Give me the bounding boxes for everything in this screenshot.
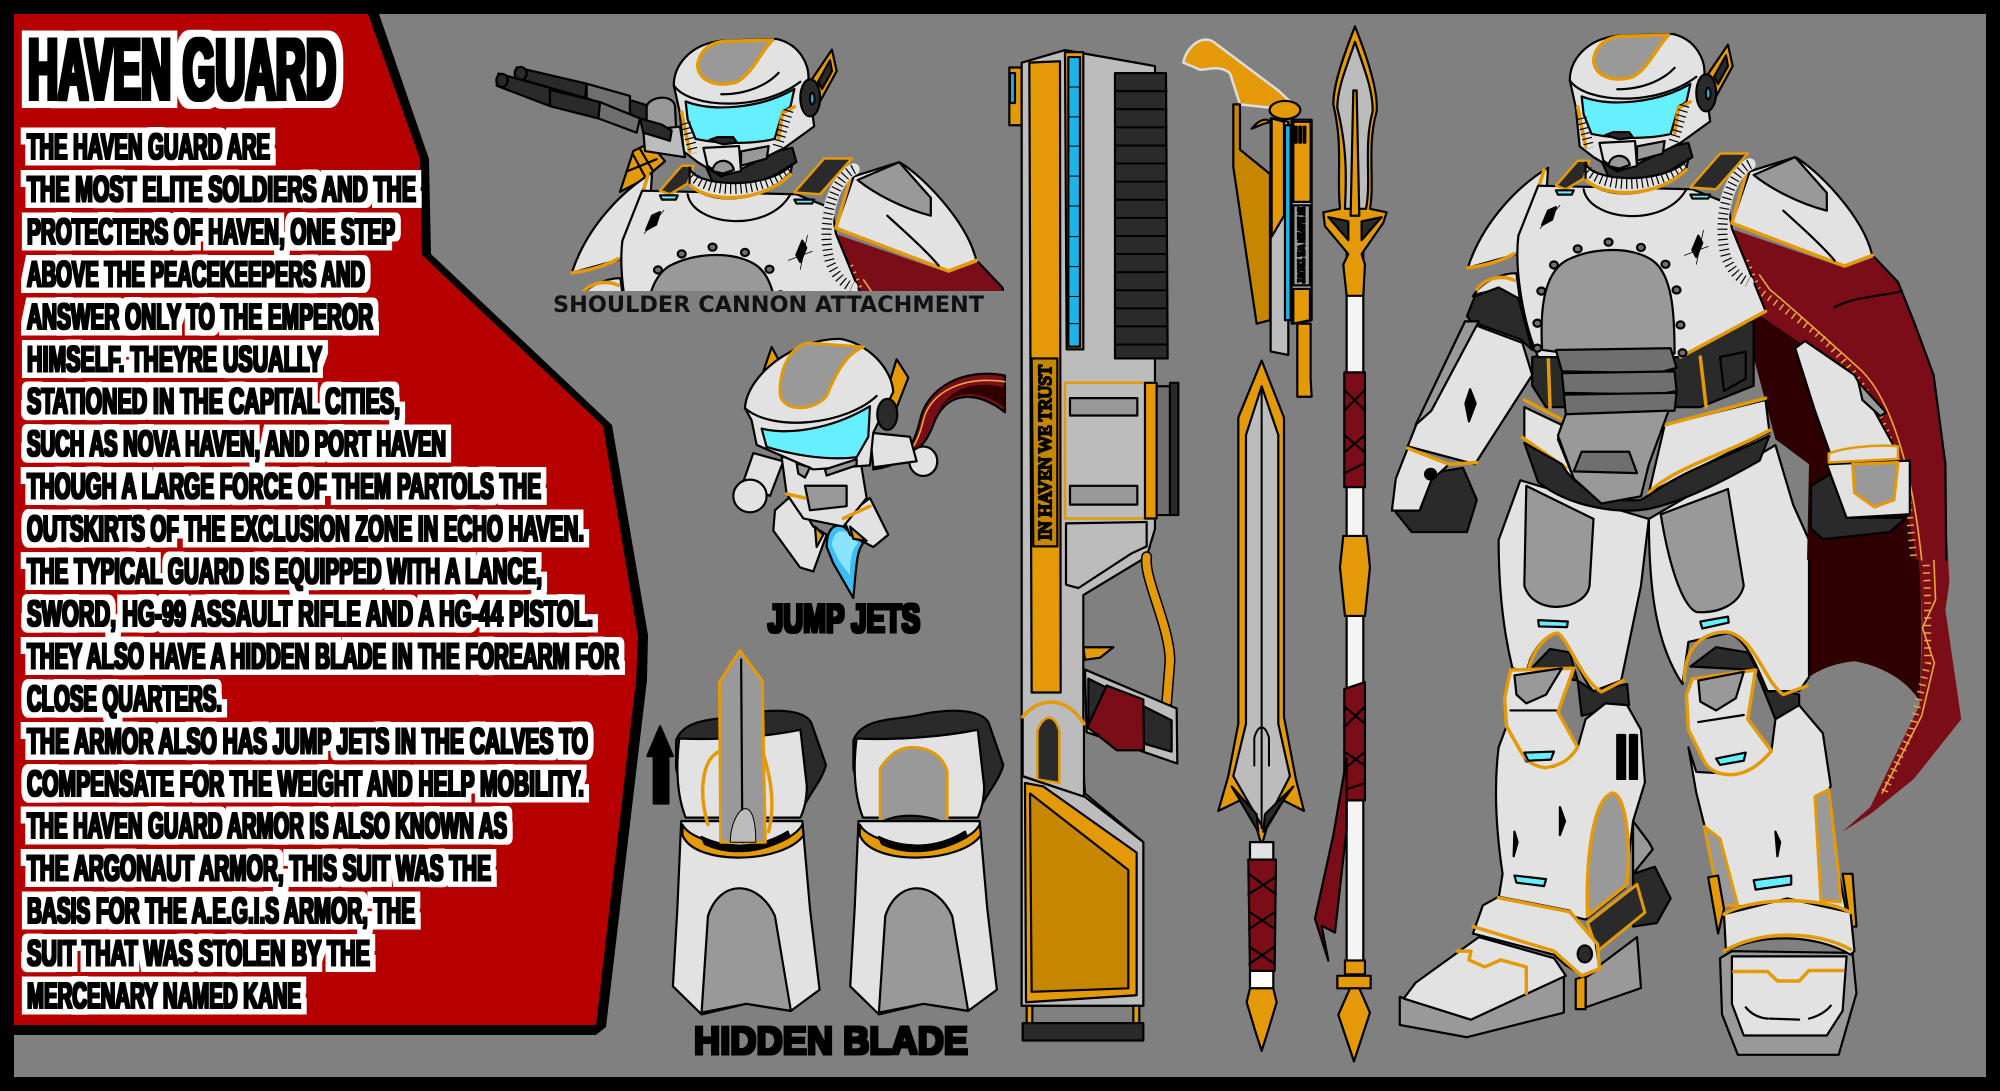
- left sleeve: [1473, 273, 1520, 304]
- lore text block: SUIT THAT WAS STOLEN BY THE: [27, 933, 370, 974]
- hidden blade illustration: [647, 651, 1003, 1014]
- chibi helmet fins: [882, 359, 908, 416]
- sword collar: [1250, 842, 1273, 863]
- sword: [1218, 361, 1304, 1051]
- left knee dark joint: [1528, 649, 1629, 716]
- chibi hands: [909, 447, 937, 476]
- upper cape: [1730, 229, 1946, 560]
- lance ribbon: [1315, 759, 1347, 960]
- rifle arch: [1023, 702, 1084, 797]
- bust torso and helmet: [570, 38, 1004, 291]
- right boot toe: [1720, 951, 1856, 1055]
- lore text block: MERCENARY NAMED KANE: [27, 975, 301, 1016]
- chibi jump jets illustration: [733, 339, 1005, 598]
- rifle: HG-99 assault rifle: [1009, 50, 1178, 1041]
- helmet gold fin: [1706, 45, 1733, 96]
- left boot strap: [1588, 884, 1645, 951]
- lore text block: THE MOST ELITE SOLDIERS AND THE: [27, 168, 416, 210]
- lore text block: ANSWER ONLY TO THE EMPEROR: [27, 296, 373, 337]
- chibi cape: [873, 374, 1005, 469]
- panel red fill: [14, 14, 638, 1025]
- sword guard wings: [1232, 786, 1293, 832]
- pistol hinge: [1270, 101, 1300, 119]
- pistol slide: [1292, 120, 1312, 324]
- black ribbed heat sink: [1115, 73, 1168, 358]
- helmet ear disc: [1696, 74, 1716, 111]
- left shoulder: [1468, 168, 1548, 268]
- bracer retracted: [850, 711, 1003, 1014]
- helmet crest: [1594, 35, 1669, 79]
- lore text block: THEY ALSO HAVE A HIDDEN BLADE IN THE FOREARM FOR: [27, 635, 619, 676]
- shoulder cannon: [496, 67, 685, 157]
- thigh lights: [1538, 620, 1568, 627]
- rifle stock: [1022, 776, 1143, 1006]
- chibi body: [782, 457, 867, 527]
- left shin: [1496, 703, 1645, 920]
- lore text block: THE HAVEN GUARD ARE: [27, 126, 270, 167]
- left thigh: [1499, 480, 1649, 691]
- lore text block: THOUGH A LARGE FORCE OF THEM PARTOLS THE: [27, 466, 541, 507]
- chest lights: [1556, 190, 1710, 199]
- belt: [1524, 407, 1574, 479]
- full figure: Haven Guard armor: [1392, 34, 1961, 1055]
- rifle lower plate: [1066, 522, 1147, 588]
- calf jet housing: [1633, 867, 1671, 927]
- sword blade outer: [1218, 361, 1304, 846]
- chibi visor: [762, 406, 870, 458]
- helmet visor: [1582, 84, 1690, 138]
- lore text block: THE ARMOR ALSO HAS JUMP JETS IN THE CALVES TO: [27, 720, 588, 761]
- helmet vent: [1605, 132, 1633, 139]
- helmet cheek trim: [1578, 102, 1690, 146]
- blade: [719, 651, 765, 842]
- right gauntlet: [1827, 461, 1910, 518]
- lance head: [1323, 26, 1387, 296]
- right thigh: [1649, 445, 1809, 691]
- chest dome panel: [1542, 250, 1675, 354]
- helmet brim: [1570, 68, 1696, 99]
- jet flame: [827, 526, 863, 598]
- chibi legs: [773, 494, 827, 571]
- shoulder cannon attachment illustration: [495, 38, 1004, 291]
- caption: hidden blade: HIDDEN BLADE: [694, 1020, 968, 1063]
- rifle side box: [1065, 383, 1157, 519]
- left arm band: [1467, 287, 1532, 350]
- rifle body: [1022, 50, 1155, 1006]
- trigger guard: [1146, 557, 1170, 703]
- rifle side tab: [1009, 68, 1022, 125]
- helmet: [1570, 34, 1710, 171]
- right knee dark joint: [1690, 647, 1799, 719]
- rifle foot: [1027, 1006, 1139, 1025]
- caption: shoulder cannon attachment: SHOULDER CANNON ATTACHMENT: [553, 293, 984, 318]
- left upper arm: [1408, 321, 1532, 464]
- lore text block: [27, 126, 619, 1016]
- pistol guard: [1233, 104, 1270, 324]
- lore text block: THE ARGONAUT ARMOR, THIS SUIT WAS THE: [27, 848, 491, 889]
- shin lights: [1514, 876, 1546, 886]
- battle damage: [1514, 807, 1780, 856]
- lance tail: [1345, 960, 1365, 974]
- lore text block: CLOSE QUARTERS.: [27, 678, 222, 719]
- engraved plate: [1032, 358, 1057, 546]
- lore text block: SUCH AS NOVA HAVEN, AND PORT HAVEN: [27, 423, 446, 464]
- blue energy column: [1065, 52, 1083, 349]
- chibi helmet: [745, 339, 893, 469]
- left thigh panel: [1524, 486, 1594, 607]
- pelvis plate: [1558, 411, 1669, 504]
- crotch dark band: [1524, 436, 1769, 511]
- lore text block: THE HAVEN GUARD ARMOR IS ALSO KNOWN AS: [27, 805, 507, 846]
- left shin vents: [1617, 735, 1637, 779]
- sword blade inner: [1233, 386, 1290, 828]
- collar: [1584, 189, 1686, 216]
- left knee pad: [1505, 668, 1578, 768]
- lore text block: SWORD, HG-99 ASSAULT RIFLE AND A HG-44 PISTOL.: [27, 593, 593, 634]
- right arm: [1795, 341, 1894, 455]
- pistol engraving: IN HAVEN WE TRUST: [1296, 207, 1306, 283]
- lance middle gold grip: [1340, 536, 1370, 616]
- right knee pad: [1686, 670, 1771, 775]
- lore text block: STATIONED IN THE CAPITAL CITIES,: [27, 381, 400, 422]
- lore text block: HIMSELF. THEYRE USUALLY: [27, 338, 322, 379]
- caption: jump jets: JUMP JETS: [768, 597, 920, 641]
- right shoulder: [1732, 157, 1872, 266]
- sword pommel: [1247, 988, 1277, 1051]
- chibi ear disc: [877, 399, 897, 430]
- panel border: [14, 14, 648, 1035]
- right boot wings: [1708, 874, 1856, 934]
- gold backpack: [620, 143, 665, 192]
- pistol grip: [1183, 40, 1293, 108]
- rifle gold stripe: [1029, 61, 1061, 693]
- abdomen plates: [1556, 348, 1677, 373]
- arrow up: [647, 726, 673, 804]
- chest rivets: [1533, 239, 1686, 356]
- left boot heel: [1586, 937, 1641, 1007]
- lore text block: BASIS FOR THE A.E.G.I.S ARMOR, THE: [27, 890, 415, 931]
- chest damage marks: [1542, 207, 1805, 257]
- right shin side panels: [1704, 826, 1738, 905]
- left glove: [1396, 468, 1477, 532]
- pistol center barrel: [1271, 118, 1288, 355]
- lance lower wrap: [1344, 682, 1365, 800]
- lore text block: COMPENSATE FOR THE WEIGHT AND HELP MOBILITY.: [27, 763, 584, 804]
- left boot sole: [1400, 976, 1564, 1037]
- lore text block: THE TYPICAL GUARD IS EQUIPPED WITH A LANCE,: [27, 550, 542, 592]
- figure upper body: [1392, 34, 1946, 560]
- lore text block: ABOVE THE PEACEKEEPERS AND: [27, 253, 365, 294]
- left gauntlet: [1392, 448, 1449, 511]
- left ankle plate: [1473, 897, 1599, 977]
- right glove: [1811, 471, 1906, 539]
- left shin gold slot: [1587, 793, 1628, 916]
- right thigh panel: [1661, 489, 1744, 612]
- panel: lore: [14, 14, 648, 1035]
- left boot top: [1404, 937, 1566, 1020]
- lance: [1315, 26, 1387, 1061]
- trigger: [1083, 647, 1113, 660]
- right cuff: [1829, 446, 1898, 462]
- lance shaft: [1347, 230, 1363, 967]
- chest plate: [1517, 186, 1766, 357]
- knee gold arcs: [1528, 633, 1623, 692]
- figure legs and lower cape: [1400, 445, 1961, 1055]
- lance upper wrap: [1344, 372, 1365, 487]
- pistol muzzle: [1297, 324, 1312, 397]
- lore text block: OUTSKIRTS OF THE EXCLUSION ZONE IN ECHO HAVEN.: [27, 508, 584, 549]
- lore text block: PROTECTERS OF HAVEN, ONE STEP: [27, 211, 395, 252]
- pistol: HG-44: [1183, 40, 1312, 397]
- panel: lore: HAVEN GUARD: [28, 22, 336, 118]
- rifle engraving: IN HAVEN WE TRUST: [1035, 365, 1055, 540]
- right boot cuff: [1724, 898, 1854, 955]
- abdomen: [1532, 321, 1754, 407]
- grip: [1085, 670, 1177, 764]
- shoulder hatch band: [1722, 164, 1750, 282]
- chibi crest: [780, 343, 863, 408]
- pistol trigger: [1252, 120, 1271, 129]
- sword red wrap: [1248, 860, 1276, 971]
- lower cape: [1809, 505, 1961, 832]
- bracer extended: [673, 651, 826, 1014]
- rifle magazine rails: [1157, 386, 1170, 515]
- shoulder straps: [1556, 161, 1590, 189]
- red grip wrap: [1087, 686, 1144, 750]
- right shin: [1688, 705, 1847, 912]
